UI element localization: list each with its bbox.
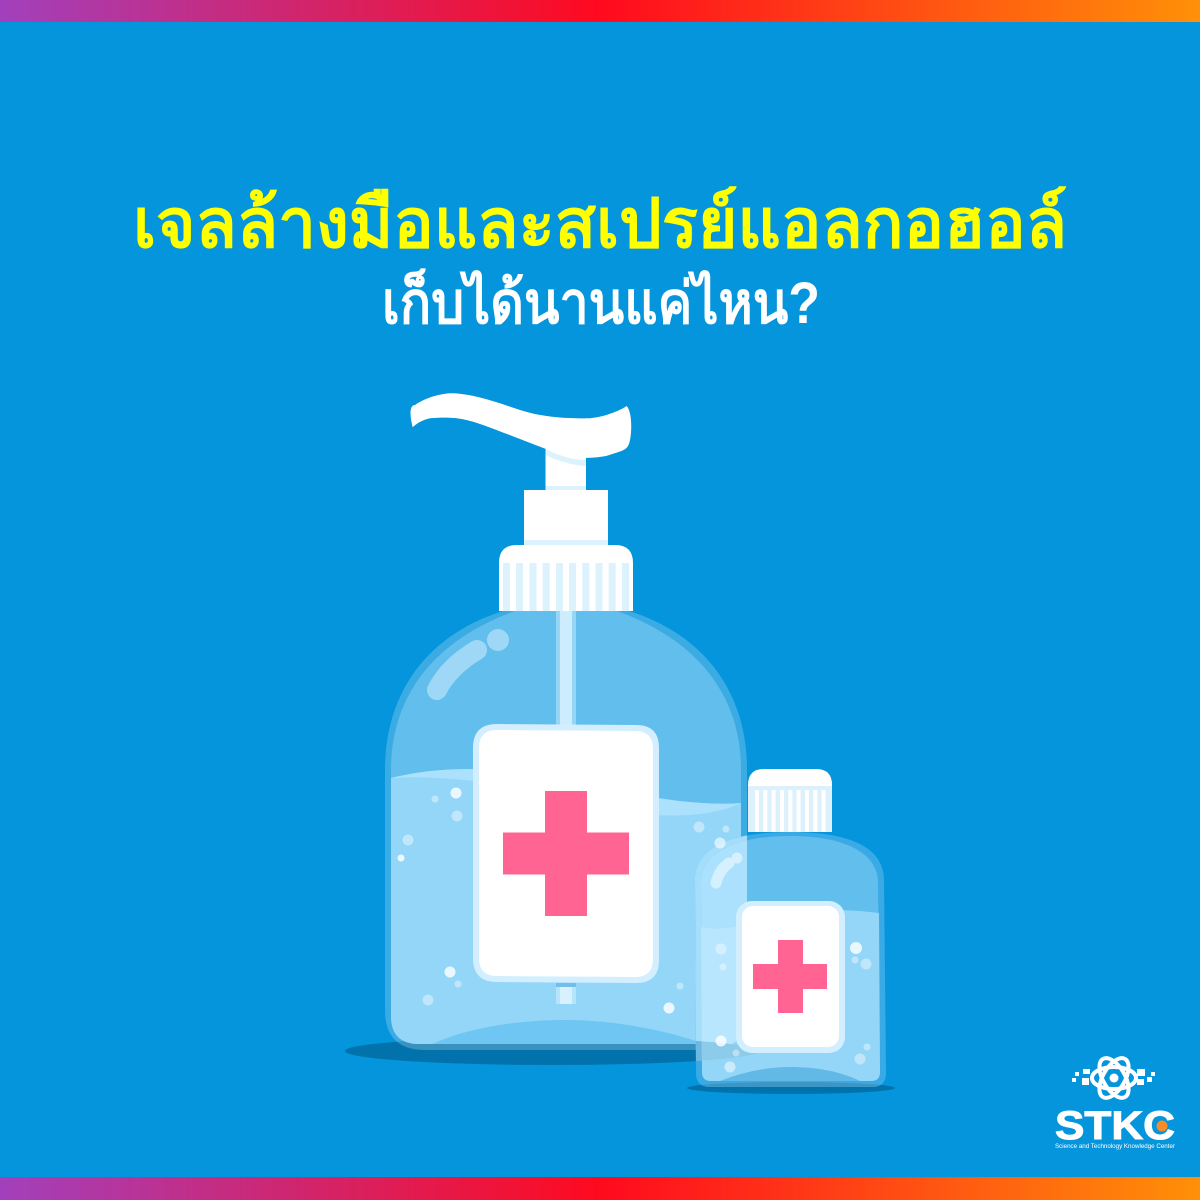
- small bottle bubbles: [714, 838, 872, 1072]
- illustration: small bottle: [687, 769, 895, 1094]
- small bottle liquid: [701, 910, 880, 1081]
- label face: [479, 730, 653, 977]
- small label: [736, 901, 845, 1053]
- small glass highlight: [716, 852, 742, 883]
- small bottle inner: [701, 836, 880, 1081]
- liquid surface highlights: [391, 769, 741, 816]
- bottle shadow: [345, 1037, 759, 1065]
- logo pixel dots: [1072, 1069, 1155, 1085]
- small bottle cap: [748, 769, 832, 832]
- liquid: [391, 769, 741, 1044]
- pump cap: [499, 545, 633, 611]
- glass highlight: [437, 629, 509, 690]
- logo atom icon: [1092, 1053, 1136, 1103]
- logo orange dot: [1156, 1120, 1168, 1132]
- logo wordmark: STKC: [1055, 1104, 1175, 1148]
- logo tagline: Science and Technology Knowledge Center: [1055, 1144, 1175, 1150]
- top gradient bar: [0, 0, 1200, 22]
- liquid bottom mound: [432, 1020, 705, 1044]
- bubbles: [398, 788, 730, 1014]
- bottle body outline: [385, 606, 747, 1050]
- small label face: [742, 906, 839, 1047]
- small bottle shadow: [687, 1082, 895, 1094]
- logo: STKC: [1055, 1053, 1175, 1150]
- bottom gradient bar: [0, 1177, 1200, 1200]
- title: [133, 186, 1067, 336]
- pump collar: [524, 490, 608, 545]
- pump head: [411, 393, 631, 458]
- small red cross: [753, 940, 827, 1013]
- pump stem: [546, 449, 586, 490]
- bottle body inner: [391, 611, 741, 1044]
- illustration: large pump bottle: [345, 393, 759, 1065]
- label: [473, 724, 659, 983]
- red cross: [503, 791, 629, 916]
- dip tube: [556, 611, 576, 1004]
- title line 1: เจลล้างมือและสเปรย์แอลกอฮอล์: [133, 186, 1067, 262]
- small bottle mound: [720, 1067, 860, 1081]
- small bottle outline: [695, 832, 886, 1087]
- title line 2: เก็บได้นานแค่ไหน?: [382, 268, 820, 336]
